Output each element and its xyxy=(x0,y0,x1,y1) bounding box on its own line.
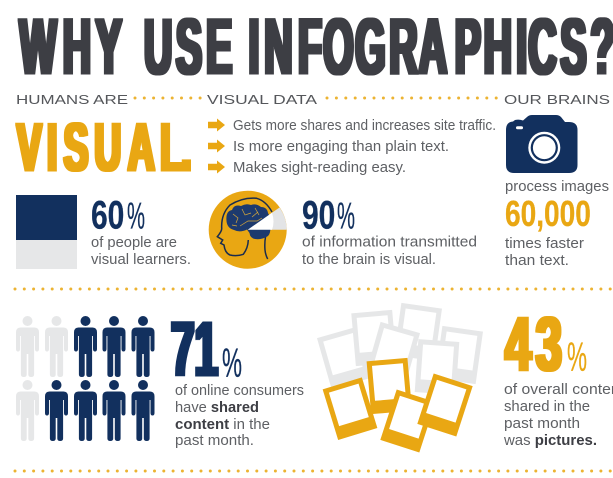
benefits list xyxy=(208,117,496,176)
percent sign: % xyxy=(567,334,587,380)
icon: head and brain pie chart xyxy=(209,191,287,269)
description line three: past month xyxy=(504,416,580,432)
title: WHY USE INFOGRAPHICS? xyxy=(20,4,613,91)
description line four: was pictures. xyxy=(503,433,597,449)
stat: 43 percent xyxy=(503,301,613,449)
description: of people are xyxy=(91,235,177,251)
icon: arrow three xyxy=(208,160,225,174)
percent sign: % xyxy=(127,195,145,236)
icon: photo stack xyxy=(317,303,483,453)
benefit two: Is more engaging than plain text. xyxy=(233,138,449,155)
icon: camera xyxy=(506,115,578,173)
icon: arrow two xyxy=(208,140,225,152)
description line three: content in the xyxy=(175,417,270,433)
process images text: process images xyxy=(505,179,609,195)
chart: people pictogram xyxy=(16,316,154,441)
stat: 71 percent xyxy=(171,308,304,449)
stat: 60 percent xyxy=(91,193,191,268)
description line two: have shared xyxy=(175,400,259,416)
times faster text: times faster xyxy=(505,236,584,252)
description line two: to the brain is visual. xyxy=(302,252,436,268)
subheading: visual data: VISUAL DATA xyxy=(207,92,317,107)
stat: 90 percent xyxy=(302,193,477,268)
number 43: 43 xyxy=(505,301,562,387)
than text: than text. xyxy=(505,253,569,269)
description: of overall content xyxy=(504,382,613,398)
percent sign: % xyxy=(337,195,355,236)
number 60: 60 xyxy=(91,193,124,237)
heading: visual: VISUAL. xyxy=(17,110,192,186)
number 71: 71 xyxy=(171,308,218,393)
number 90: 90 xyxy=(302,193,335,237)
subheading: our brains: OUR BRAINS xyxy=(504,92,610,107)
benefit three: Makes sight-reading easy. xyxy=(233,159,406,176)
description: of information transmitted xyxy=(302,234,477,250)
description: of online consumers xyxy=(175,383,304,399)
subheading: humans are: HUMANS ARE xyxy=(16,92,128,107)
benefit one: Gets more shares and increases site traffic. xyxy=(233,117,496,134)
stat: process images 60,000 xyxy=(505,179,609,269)
description line two: shared in the xyxy=(504,399,590,415)
description line four: past month. xyxy=(175,433,254,449)
number 60,000: 60,000 xyxy=(505,194,591,234)
percent sign: % xyxy=(222,340,242,386)
icon: arrow one xyxy=(208,118,225,132)
chart: 60 percent square xyxy=(16,195,77,269)
description line two: visual learners. xyxy=(91,252,191,268)
